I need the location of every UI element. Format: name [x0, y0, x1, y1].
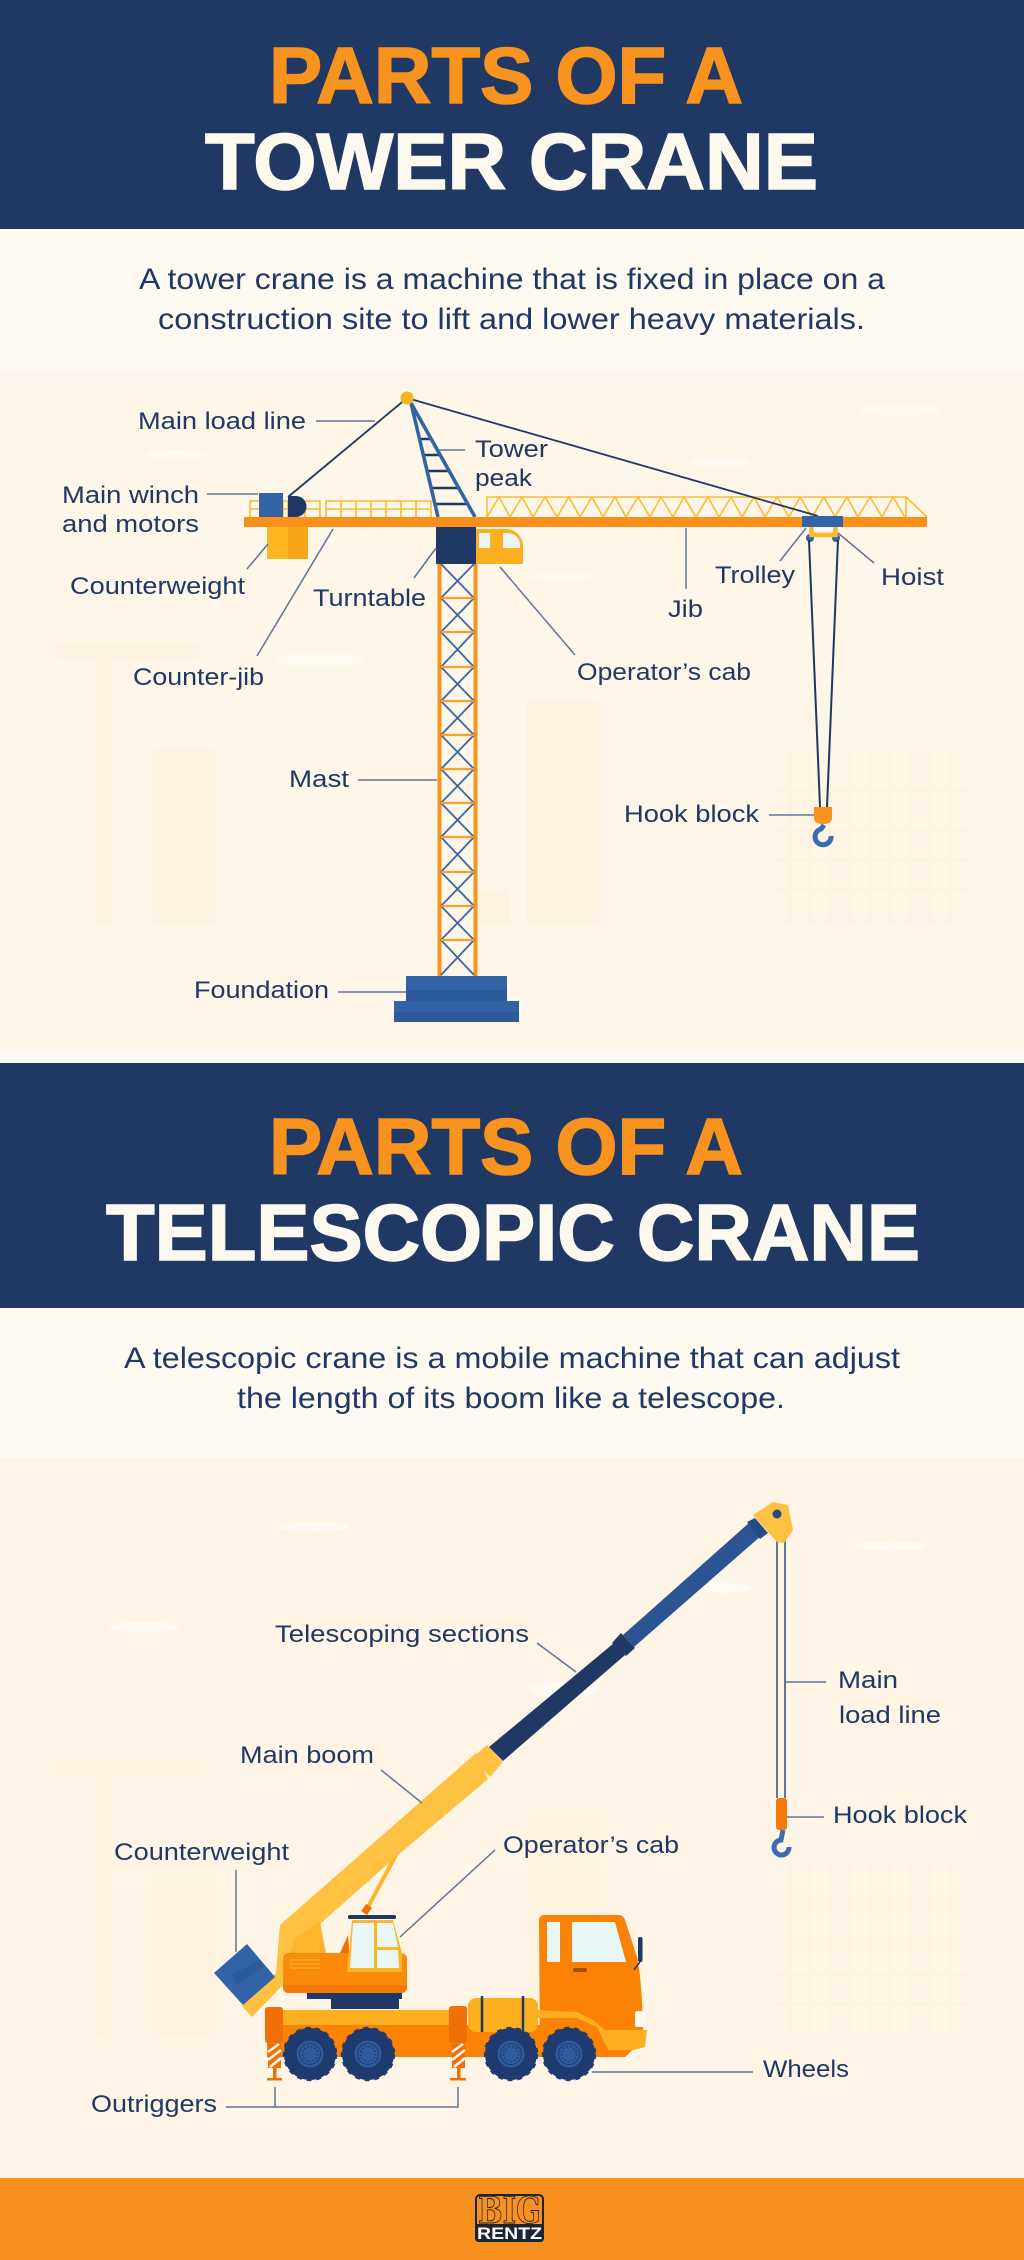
- label: main winch and motors: and motors: [62, 511, 199, 538]
- label: main load line: Main: [838, 1667, 898, 1694]
- wheels: [284, 2028, 596, 2080]
- main boom: [242, 1745, 503, 2017]
- logo: BigRentz: [475, 2190, 544, 2243]
- operator cab: [476, 529, 523, 564]
- label: hoist: [838, 533, 944, 591]
- label: hook block: Hook block: [624, 801, 760, 828]
- title line: parts of a: PARTS OF A: [269, 31, 743, 120]
- cables: [288, 398, 818, 516]
- label: main load line: load line: [839, 1702, 941, 1729]
- label: hoist: Hoist: [881, 564, 944, 591]
- label: counterweight: Counterweight: [70, 573, 245, 600]
- label: outriggers: Outriggers: [91, 2091, 217, 2118]
- foundation: [394, 976, 519, 1022]
- telescoping section inner: [489, 1643, 625, 1761]
- title line: tower crane: TOWER CRANE: [205, 117, 818, 206]
- operator's cab: [283, 1915, 407, 2009]
- label: operator's cab: Operator’s cab: [503, 1832, 679, 1859]
- background clouds: [108, 1522, 927, 1698]
- label: operator's cab: Operator’s cab: [577, 659, 751, 686]
- label: jib: [668, 528, 703, 623]
- trolley: [802, 516, 843, 527]
- title line: telescopic crane: TELESCOPIC CRANE: [106, 1188, 920, 1277]
- main winch and motors: [259, 493, 306, 517]
- label: main boom: Main boom: [240, 1742, 374, 1769]
- hoist: [806, 527, 840, 542]
- label: counterweight: Counterweight: [114, 1839, 289, 1866]
- intro text: tower crane: A tower crane is a machine that is fixed in place on a: [139, 263, 885, 296]
- tower peak: [411, 403, 475, 517]
- label: telescoping sections: Telescoping sections: [275, 1621, 529, 1648]
- title line: parts of a: PARTS OF A: [269, 1102, 743, 1191]
- intro text: tower crane: [139, 263, 885, 336]
- background skyline silhouettes: [55, 1759, 967, 2037]
- hook block: [774, 1798, 789, 1855]
- counter-jib railing: [250, 501, 431, 517]
- label: turntable: [313, 548, 436, 612]
- counterweight block: [214, 1944, 275, 2005]
- background clouds: [147, 404, 940, 668]
- label: counterweight: [70, 544, 268, 600]
- jib and counter-jib beam: [244, 517, 927, 527]
- label: counter-jib: Counter-jib: [133, 664, 264, 691]
- turntable: [436, 527, 476, 564]
- label: mast: Mast: [289, 766, 349, 793]
- counterweight: [267, 527, 308, 559]
- main boom strut: [364, 1853, 397, 1913]
- tower crane illustration: [244, 392, 927, 1022]
- label: foundation: Foundation: [194, 977, 329, 1004]
- label: wheels: Wheels: [763, 2056, 849, 2083]
- hook block: [814, 807, 832, 845]
- intro text: tower crane: construction site to lift and lower heavy materials.: [158, 303, 865, 336]
- panel background: [0, 1458, 1024, 2178]
- telescoping section outer: [623, 1522, 762, 1647]
- label: jib: Jib: [668, 596, 703, 623]
- peak pin: [400, 392, 414, 404]
- load lines: [777, 1540, 785, 1798]
- label: turntable: Turntable: [313, 585, 426, 612]
- fuel tank: [468, 1996, 538, 2032]
- outriggers: [265, 2006, 467, 2080]
- label: hook block: Hook block: [833, 1802, 968, 1829]
- label: main load line: [785, 1667, 941, 1729]
- intro text: telescopic crane: A telescopic crane is a mobile machine that can adjust: [124, 1342, 901, 1375]
- header: tower crane: [0, 0, 1024, 229]
- label: operator's cab: [500, 567, 751, 686]
- label: telescoping sections: [275, 1621, 576, 1672]
- label: main boom: [240, 1742, 422, 1803]
- label: tower peak: Tower: [475, 436, 548, 463]
- panel: tower crane diagram: [0, 372, 1024, 1047]
- label: main winch and motors: [62, 482, 258, 538]
- label: trolley: Trolley: [715, 562, 795, 589]
- telescopic crane illustration: [214, 1502, 793, 2080]
- jib truss: [487, 497, 927, 517]
- label: tower peak: peak: [475, 465, 533, 492]
- mast: [438, 563, 478, 976]
- hoist cables: [809, 540, 838, 807]
- label: main load line: Main load line: [138, 408, 306, 435]
- background skyline silhouettes: [55, 645, 967, 923]
- intro text: telescopic crane: the length of its boom like a telescope.: [237, 1382, 785, 1415]
- header: telescopic crane: [0, 1063, 1024, 1308]
- truck cab: [538, 1915, 647, 2057]
- label: counter-jib: [133, 529, 333, 691]
- boom head: [753, 1502, 793, 1543]
- label: main winch and motors: Main winch: [62, 482, 199, 509]
- label: tower peak: [438, 436, 548, 492]
- boom tip collar: [747, 1518, 768, 1539]
- label: outriggers: [91, 2087, 458, 2118]
- intro text: telescopic crane: [124, 1342, 901, 1415]
- panel: telescopic crane diagram: [0, 1458, 1024, 2178]
- chassis: [267, 2010, 567, 2057]
- panel background: [0, 372, 1024, 1047]
- logo: BigRentz: RENTZ: [477, 2224, 542, 2243]
- label: trolley: [715, 528, 806, 589]
- label: operator's cab: [400, 1832, 679, 1937]
- footer bar: [0, 2178, 1024, 2260]
- logo: BigRentz: BIG: [478, 2190, 541, 2232]
- telescoping joint collar: [612, 1633, 635, 1656]
